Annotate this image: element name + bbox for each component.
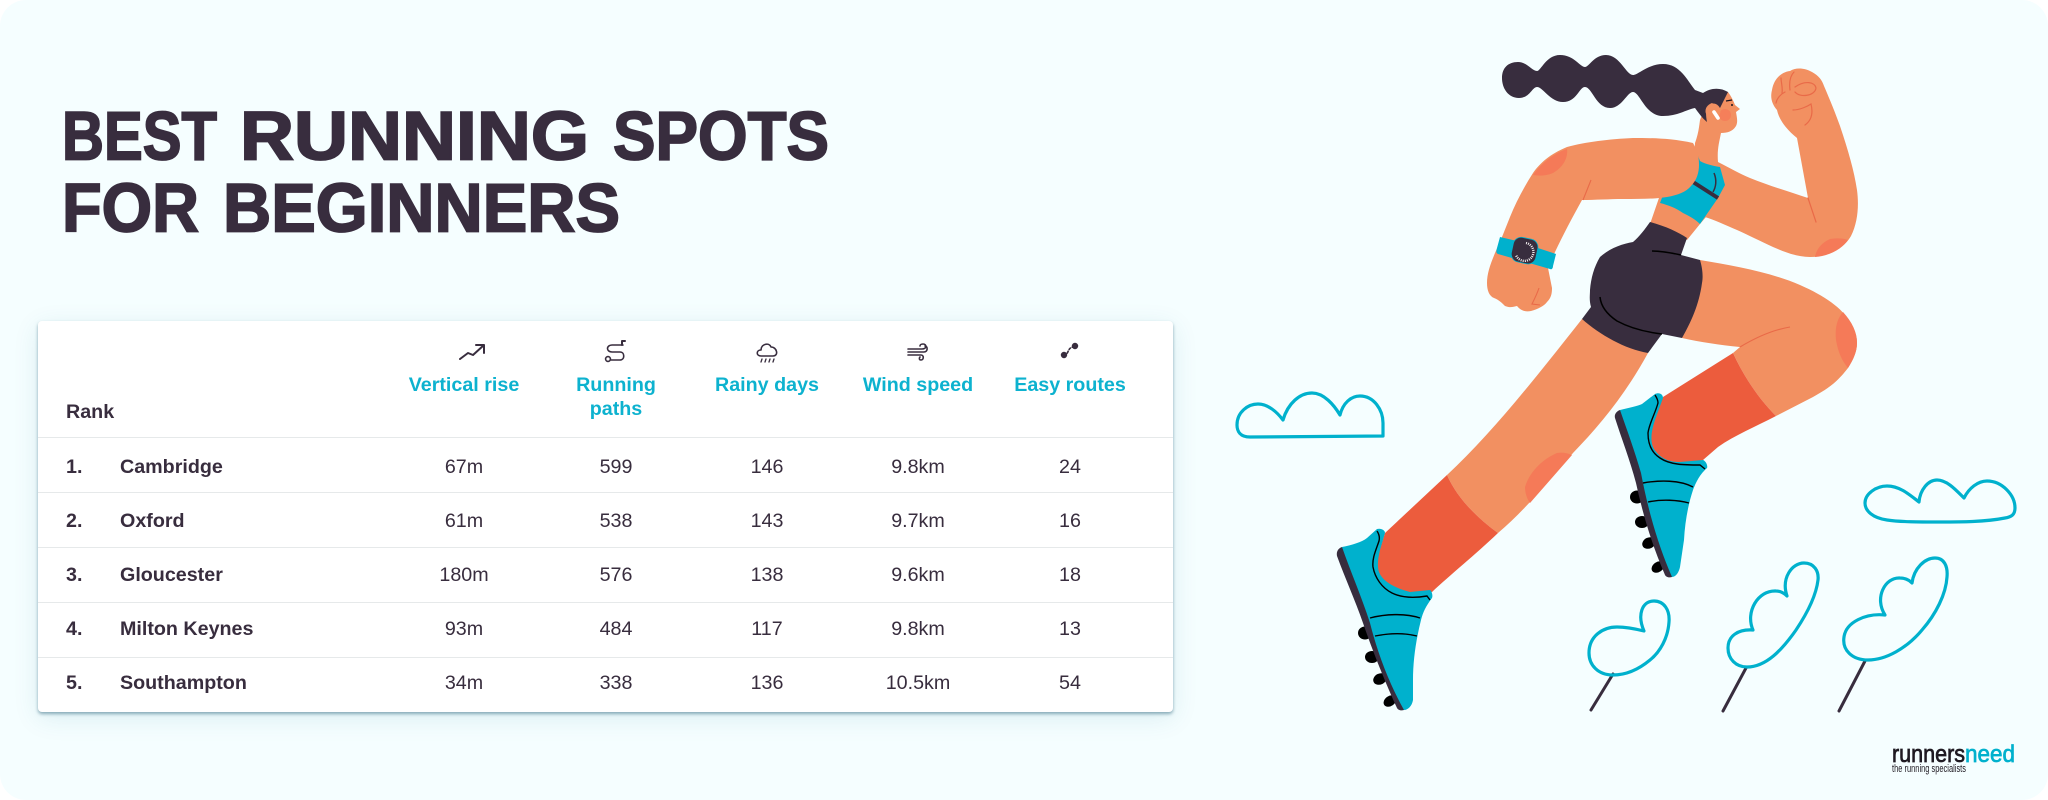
column heading: running paths: Running: [576, 374, 656, 396]
runner: front leg: [1648, 260, 1857, 467]
row: Milton Keynes: 117: [751, 618, 783, 640]
title: RUNNING: [240, 98, 589, 174]
runner: rear leg: [1375, 319, 1648, 596]
row: Cambridge: [38, 437, 1173, 492]
row: Oxford: 538: [600, 510, 632, 532]
row: Gloucester: Gloucester: [120, 564, 223, 586]
row: Cambridge: 599: [600, 456, 632, 478]
cloud right: [1865, 480, 2015, 522]
row: Southampton: [38, 657, 1173, 712]
row: Oxford: 2.: [66, 510, 82, 532]
logo: runnersneed: need: [1965, 741, 2015, 768]
runner: rear shoe: [1337, 529, 1432, 710]
icon: wind: [907, 343, 928, 361]
row: Gloucester: 3.: [66, 564, 82, 586]
logo: runnersneed: [1892, 741, 2015, 775]
row: Oxford: 143: [751, 510, 783, 532]
row: Southampton: 136: [751, 672, 783, 694]
runner: midriff: [1650, 195, 1712, 240]
runner: ear and earbud: [1706, 104, 1720, 118]
column heading: rank: Rank: [66, 401, 114, 423]
row: Oxford: 61m: [445, 510, 483, 532]
tree 1: [1589, 601, 1669, 710]
row: Milton Keynes: 484: [600, 618, 632, 640]
row: Milton Keynes: 93m: [445, 618, 483, 640]
row: Southampton: 338: [600, 672, 632, 694]
row: Milton Keynes: Milton Keynes: [120, 618, 253, 640]
row: Cambridge: 1.: [66, 456, 82, 478]
icon: easy route: [1060, 342, 1078, 358]
column heading: running paths: paths: [590, 398, 642, 420]
row: Cambridge: 67m: [445, 456, 483, 478]
logo: runnersneed: the running specialists: [1892, 763, 1966, 775]
row: Gloucester: 138: [751, 564, 783, 586]
title: [62, 98, 829, 246]
row: Gloucester: 9.6km: [891, 564, 945, 586]
row: Oxford: [38, 492, 1173, 547]
runner: ponytail and hair: [1502, 55, 1728, 122]
runner: shorts: [1582, 222, 1703, 353]
column heading: running paths: [576, 374, 656, 420]
title: SPOTS: [613, 98, 829, 174]
runner: sports bra: [1660, 144, 1725, 224]
row: Milton Keynes: 13: [1059, 618, 1081, 640]
icon: rain cloud: [756, 343, 778, 363]
row: Milton Keynes: 9.8km: [891, 618, 945, 640]
row: Gloucester: 180m: [439, 564, 489, 586]
icon: running path: [604, 340, 626, 362]
title: FOR: [62, 170, 199, 246]
logo: runnersneed: runners: [1892, 741, 1965, 768]
row: Cambridge: 24: [1059, 456, 1081, 478]
row: Southampton: 5.: [66, 672, 82, 694]
row: Southampton: 34m: [445, 672, 483, 694]
icon: vertical rise arrow: [459, 344, 485, 360]
runner: front arm: [1705, 68, 1858, 257]
runner: neck and head: [1693, 92, 1740, 178]
row: Southampton: 54: [1059, 672, 1081, 694]
row: Southampton: Southampton: [120, 672, 247, 694]
row: Milton Keynes: 4.: [66, 618, 82, 640]
title: BEGINNERS: [223, 170, 620, 246]
column heading: easy routes: Easy routes: [1014, 374, 1126, 396]
runner: front shoe: [1615, 393, 1707, 577]
row: Oxford: Oxford: [120, 510, 185, 532]
row: Milton Keynes: [38, 602, 1173, 657]
row: Cambridge: 146: [751, 456, 783, 478]
row: Oxford: 16: [1059, 510, 1081, 532]
row: Southampton: 10.5km: [886, 672, 950, 694]
row: Cambridge: Cambridge: [120, 456, 223, 478]
tree 2: [1723, 563, 1818, 711]
row: Gloucester: 576: [600, 564, 632, 586]
row: Oxford: 9.7km: [891, 510, 945, 532]
row: Gloucester: [38, 547, 1173, 602]
tree 3: [1839, 558, 1947, 711]
title: BEST: [62, 98, 217, 174]
panel: rankings table: [38, 321, 1173, 712]
column heading: vertical rise: Vertical rise: [409, 374, 519, 396]
cloud left: [1237, 393, 1383, 437]
runner: rear arm with watch: [1487, 138, 1699, 311]
row: Gloucester: 18: [1059, 564, 1081, 586]
column heading: rainy days: Rainy days: [715, 374, 819, 396]
column heading: wind speed: Wind speed: [863, 374, 973, 396]
row: Cambridge: 9.8km: [891, 456, 945, 478]
